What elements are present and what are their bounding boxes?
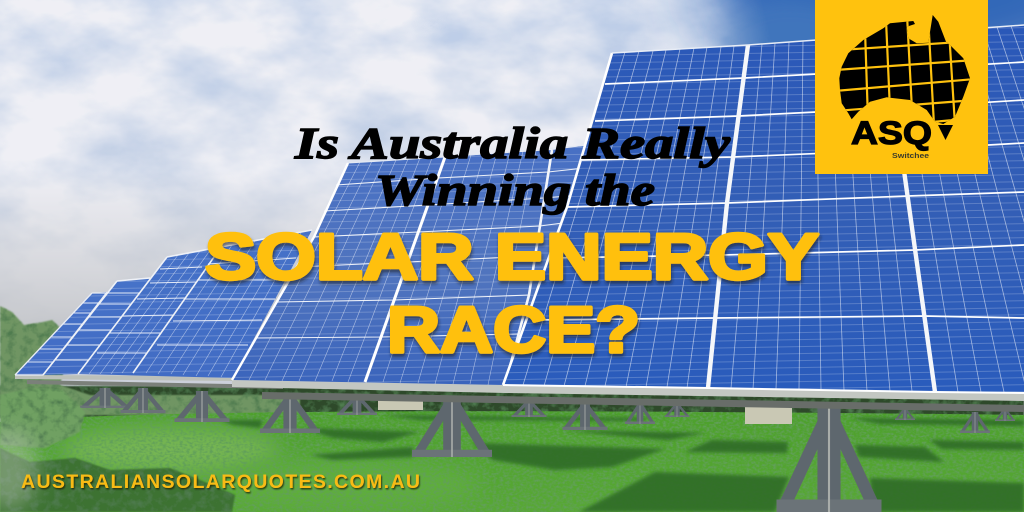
solar array: far left xyxy=(15,292,107,375)
headline: race: RACE? xyxy=(387,293,640,366)
solar array: large right xyxy=(503,25,1024,393)
website url: AUSTRALIANSOLARQUOTES.COM.AU xyxy=(21,471,420,493)
solar array: centre xyxy=(232,145,590,385)
mounting pylons xyxy=(80,388,1015,512)
switchee mark: Switchee xyxy=(892,153,929,160)
title line 1: Is Australia Really xyxy=(294,119,731,168)
headline: solar energy: SOLAR ENERGY xyxy=(205,220,819,293)
logo wordmark: ASQ xyxy=(851,115,932,151)
icon: australia map with solar grid xyxy=(835,15,975,140)
mounting rails xyxy=(15,375,1024,412)
logo badge xyxy=(815,0,988,174)
solar array: second left xyxy=(43,230,312,378)
sky background with clouds xyxy=(0,0,1024,337)
buildings behind the panels xyxy=(378,395,792,424)
panel shadows on grass xyxy=(220,415,1024,512)
title line 2: Winning the xyxy=(375,166,655,215)
grass field xyxy=(0,411,1024,512)
left foreground bushes xyxy=(0,388,235,512)
background trees and hedges xyxy=(0,306,1024,418)
